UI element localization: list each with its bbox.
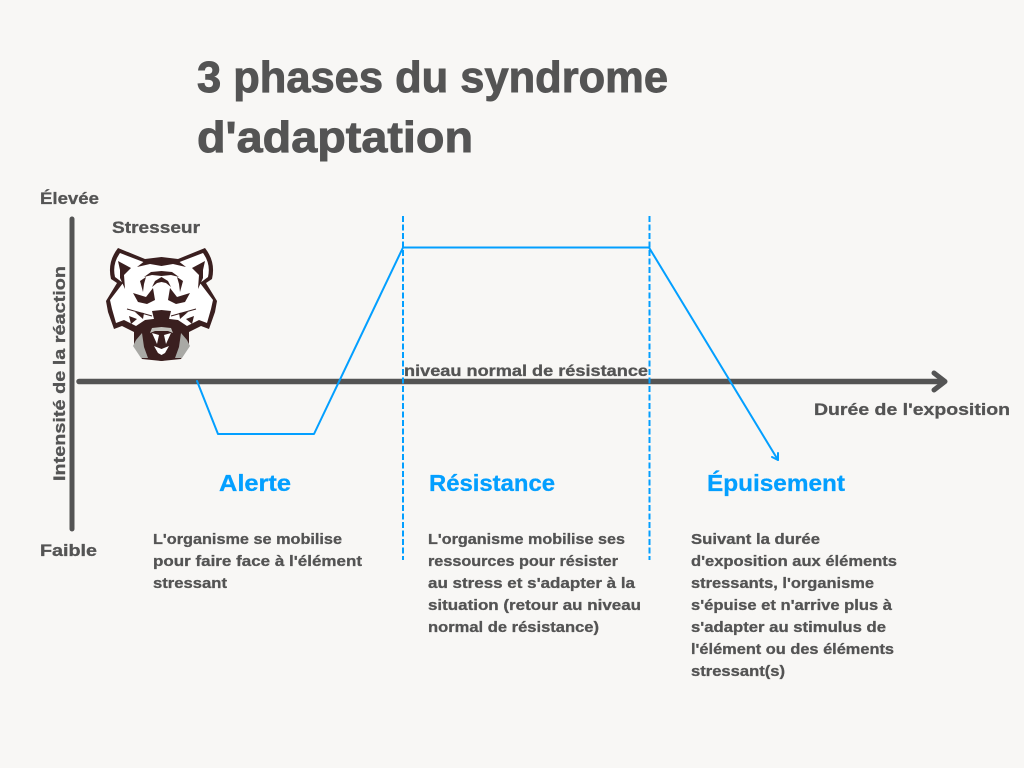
- phase: alert: L'organisme se mobilise: [153, 531, 342, 548]
- phase: exhaustion: stressants, l'organisme: [691, 575, 874, 592]
- phase: alert: stressant: [153, 575, 227, 592]
- phase: exhaustion: Épuisement: [707, 469, 845, 496]
- phase: resistance: au stress et s'adapter à la: [428, 575, 636, 592]
- title: 3 phases du syndrome: [197, 53, 668, 102]
- icon: tiger head: [106, 248, 217, 361]
- y axis line: [70, 219, 74, 529]
- title: [197, 53, 668, 162]
- y axis label: low: Faible: [40, 541, 97, 560]
- phase: exhaustion: s'épuise et n'arrive plus à: [691, 597, 893, 614]
- x axis arrow: [79, 373, 945, 390]
- phase: resistance: normal de résistance): [428, 619, 599, 636]
- phase: resistance: ressources pour résister: [428, 553, 618, 570]
- phase: exhaustion: [691, 469, 897, 680]
- phase: exhaustion: s'adapter au stimulus de: [691, 619, 886, 636]
- stressor label: Stresseur: [112, 218, 200, 237]
- phase: resistance: [428, 470, 641, 636]
- phase: exhaustion: d'exposition aux éléments: [691, 553, 897, 570]
- y axis label: high: Élevée: [40, 189, 99, 208]
- phase: resistance: L'organisme mobilise ses: [428, 531, 625, 548]
- phase: alert: [153, 470, 362, 592]
- phase: alert: Alerte: [219, 470, 291, 496]
- title: d'adaptation: [197, 113, 473, 162]
- stress response curve: [197, 248, 778, 460]
- phase: alert: pour faire face à l'élément: [153, 553, 362, 570]
- phase: exhaustion: l'élément ou des éléments: [691, 641, 894, 658]
- y axis title: Intensité de la réaction: [50, 266, 69, 481]
- phase divider: resistance to exhaustion: [648, 216, 650, 560]
- phase: resistance: situation (retour au niveau: [428, 597, 641, 614]
- normal resistance level label: niveau normal de résistance: [404, 363, 648, 380]
- phase: resistance: Résistance: [429, 470, 555, 496]
- phase: exhaustion: Suivant la durée: [691, 531, 820, 548]
- x axis label: Durée de l'exposition: [814, 400, 1010, 419]
- phase divider: alert to resistance: [402, 216, 404, 560]
- phase: exhaustion: stressant(s): [691, 663, 785, 680]
